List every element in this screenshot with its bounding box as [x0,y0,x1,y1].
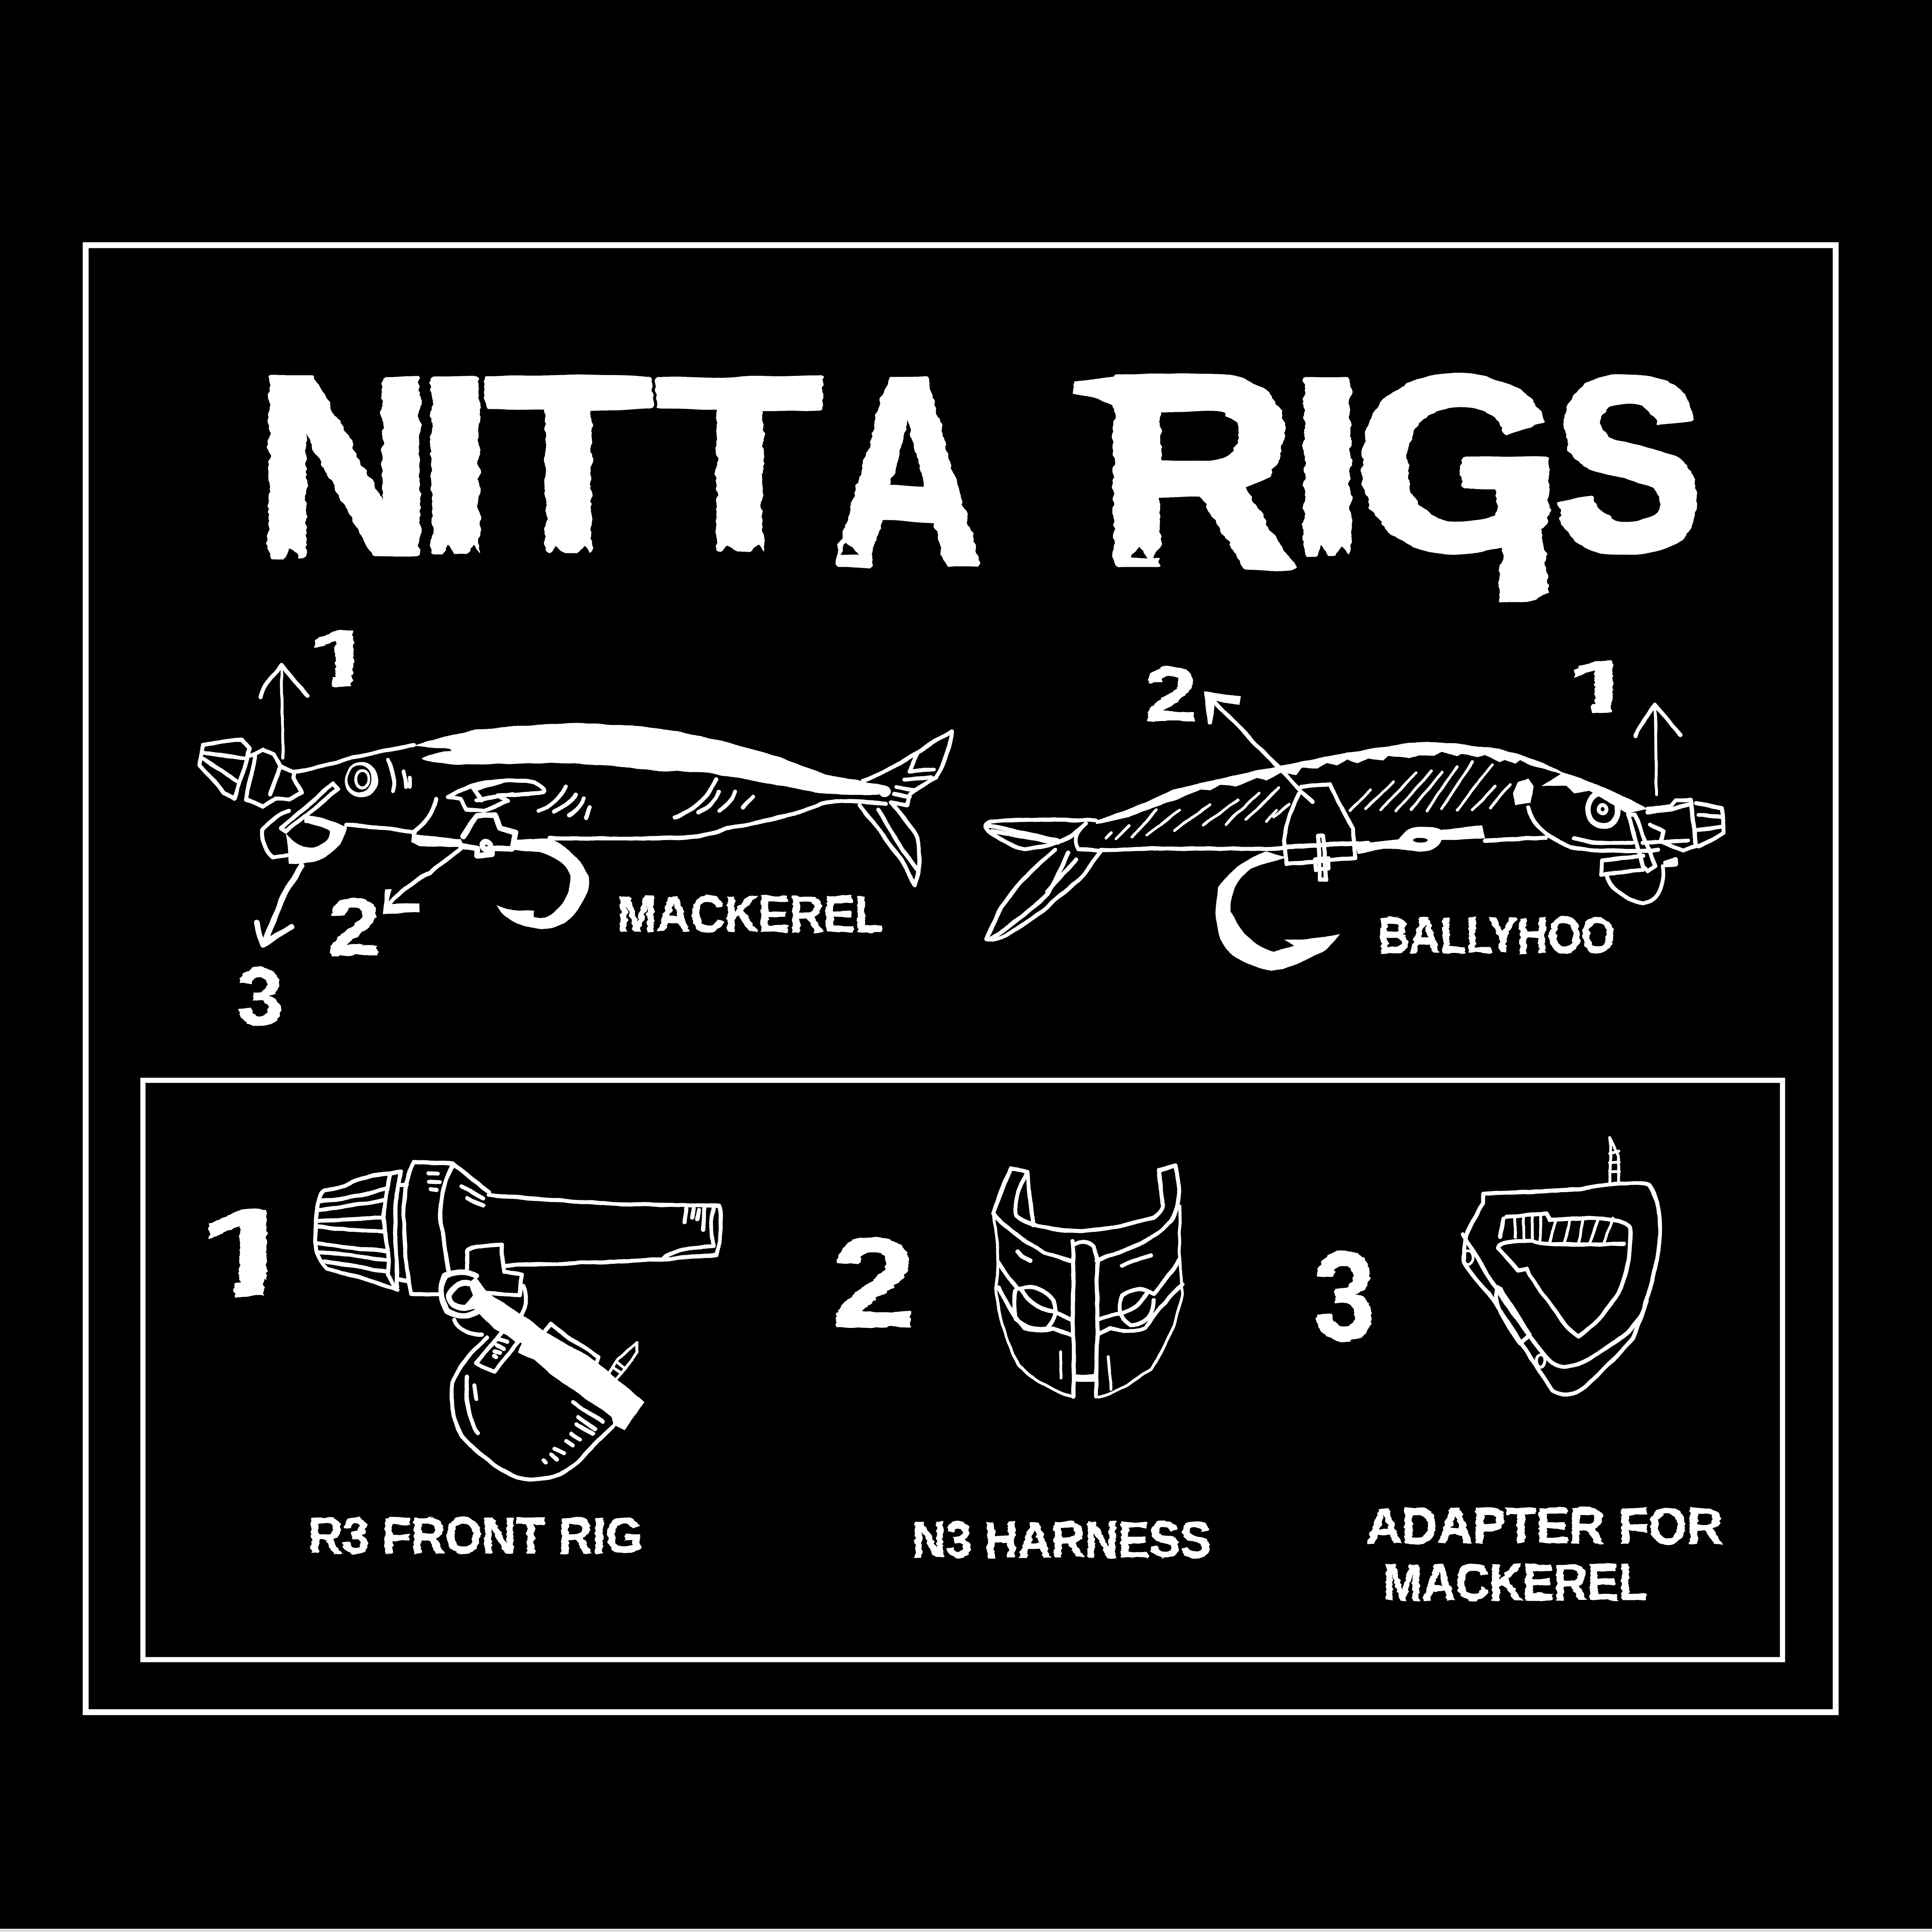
harness [993,1165,1182,1397]
arrow 1 [261,665,308,759]
number 1 mackerel: 1 [308,613,375,703]
ballyhoo illustration [986,692,1724,971]
number 1 ballyhoo: 1 [1567,645,1635,728]
ring [441,1272,476,1316]
title: T [656,326,823,602]
head lines [1528,808,1658,851]
pin [1314,835,1328,880]
label: adapter for mackerel: MACKEREL [1383,1554,1647,1611]
hatch [544,1402,602,1463]
label: N3 harness: N3 HARNESS [912,1512,1211,1568]
icon: R3 front rig [315,1162,721,1480]
mackerel label: MACKEREL [618,886,883,943]
ballyhoo label: BALLYHOO [1378,907,1615,964]
lure head [199,739,302,806]
number 2 panel: 2 [831,1211,916,1354]
adapter [1462,1137,1660,1395]
number 3 mackerel: 3 [237,952,283,1041]
gill spot [1513,778,1533,805]
pectoral fin and scales [448,779,753,818]
mackerel illustration [199,665,951,945]
inner parts panel [143,1081,1782,1660]
mouth ring [262,783,347,864]
label: adapter for mackerel [1366,1498,1723,1611]
label: R3 front rig: R3 FRONT RIG [308,1507,643,1564]
hook [1216,851,1340,971]
number 2 ballyhoo: 2 [1145,651,1197,737]
upper plate [546,1324,598,1363]
weight [452,1287,613,1480]
number 1 panel: 1 [198,1183,300,1322]
weight tab [476,1330,518,1372]
eye [1588,793,1618,827]
collar [400,1162,489,1294]
title: I [1289,325,1365,605]
title: G [1354,326,1562,602]
tail [986,820,1101,940]
cone [315,1171,401,1289]
tube [489,1195,721,1266]
title: T [485,326,652,602]
back outline [1096,742,1648,824]
tail fin [860,731,951,885]
arrow 2 [383,849,461,914]
title: I [416,325,494,606]
title: N [255,323,433,609]
title: A [832,321,983,623]
hook [411,815,589,928]
label: adapter for mackerel: ADAPTER FOR [1366,1498,1723,1555]
hatching [1106,762,1510,838]
outer frame [86,245,1835,1712]
number 2 mackerel: 2 [328,882,380,972]
title: R [1099,318,1296,624]
title: S [1554,327,1704,602]
front rig [1601,800,1724,904]
title [255,318,1704,624]
tab [467,1245,522,1296]
arrow 3 [256,865,302,945]
eye and gills [345,760,436,831]
arm [465,1278,644,1431]
shank [1355,825,1485,854]
spike [609,1342,637,1378]
icons: harness and adapter [993,1137,1660,1397]
body outline [294,723,886,838]
belly and band [1101,784,1546,864]
arrow 2 [1204,692,1312,802]
arrow 1 [1635,705,1680,795]
number 3 panel: 3 [1314,1226,1375,1366]
